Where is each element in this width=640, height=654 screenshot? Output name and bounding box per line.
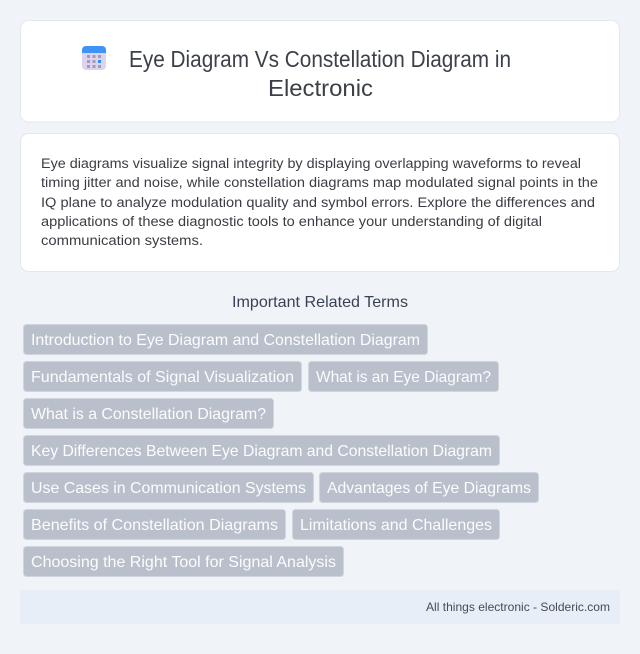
text block: introduction: applications of these diagnostic tools to enhance your understanding of digital (41, 214, 542, 230)
tag: what is an eye diagram: What is an Eye Diagram? (316, 369, 491, 386)
tag: key differences (24, 436, 500, 466)
tag: limitations: Limitations and Challenges (300, 517, 492, 534)
tag: fundamentals: Fundamentals of Signal Visualization (31, 369, 294, 386)
panel: introduction (20, 134, 620, 272)
tag: key differences: Key Differences Between Eye Diagram and Constellation Diagram (31, 443, 492, 460)
icon: calendar grid (82, 46, 106, 70)
tag: introduction: Introduction to Eye Diagram and Constellation Diagram (31, 332, 420, 349)
tag: limitations (292, 510, 500, 540)
footer (20, 590, 620, 624)
tag: advantages (320, 472, 538, 502)
text block: introduction: timing jitter and noise, while constellation diagrams map modulated signal points in the (41, 175, 598, 191)
tag: introduction (24, 324, 428, 354)
tag: use cases (24, 472, 314, 502)
text block: introduction: communication systems. (41, 233, 203, 249)
title (129, 46, 511, 101)
heading: important related terms: Important Related Terms (232, 294, 408, 311)
tag: choosing the right tool (24, 546, 344, 576)
tag: what is an eye diagram (308, 362, 498, 392)
tag: use cases: Use Cases in Communication Systems (31, 480, 306, 497)
text block: introduction: Eye diagrams visualize signal integrity by displaying overlapping waveforms to reveal (41, 156, 581, 172)
panel: related term tags (24, 324, 538, 576)
tag: advantages: Advantages of Eye Diagrams (327, 480, 531, 497)
title: Eye Diagram Vs Constellation Diagram in (129, 46, 511, 72)
tag: what is a constellation diagram: What is a Constellation Diagram? (31, 406, 266, 423)
panel: header (20, 20, 620, 122)
footer: All things electronic - Solderic.com (426, 600, 610, 614)
title: Electronic (268, 75, 373, 101)
text block: introduction (41, 156, 598, 249)
tag: choosing the right tool: Choosing the Right Tool for Signal Analysis (31, 554, 336, 571)
tag: what is a constellation diagram (24, 398, 274, 428)
text block: introduction: IQ plane to analyze modulation quality and symbol errors. Explore the differences and (41, 195, 595, 211)
tag: benefits (24, 510, 286, 540)
tag: benefits: Benefits of Constellation Diagrams (31, 517, 278, 534)
tag: fundamentals (24, 362, 302, 392)
